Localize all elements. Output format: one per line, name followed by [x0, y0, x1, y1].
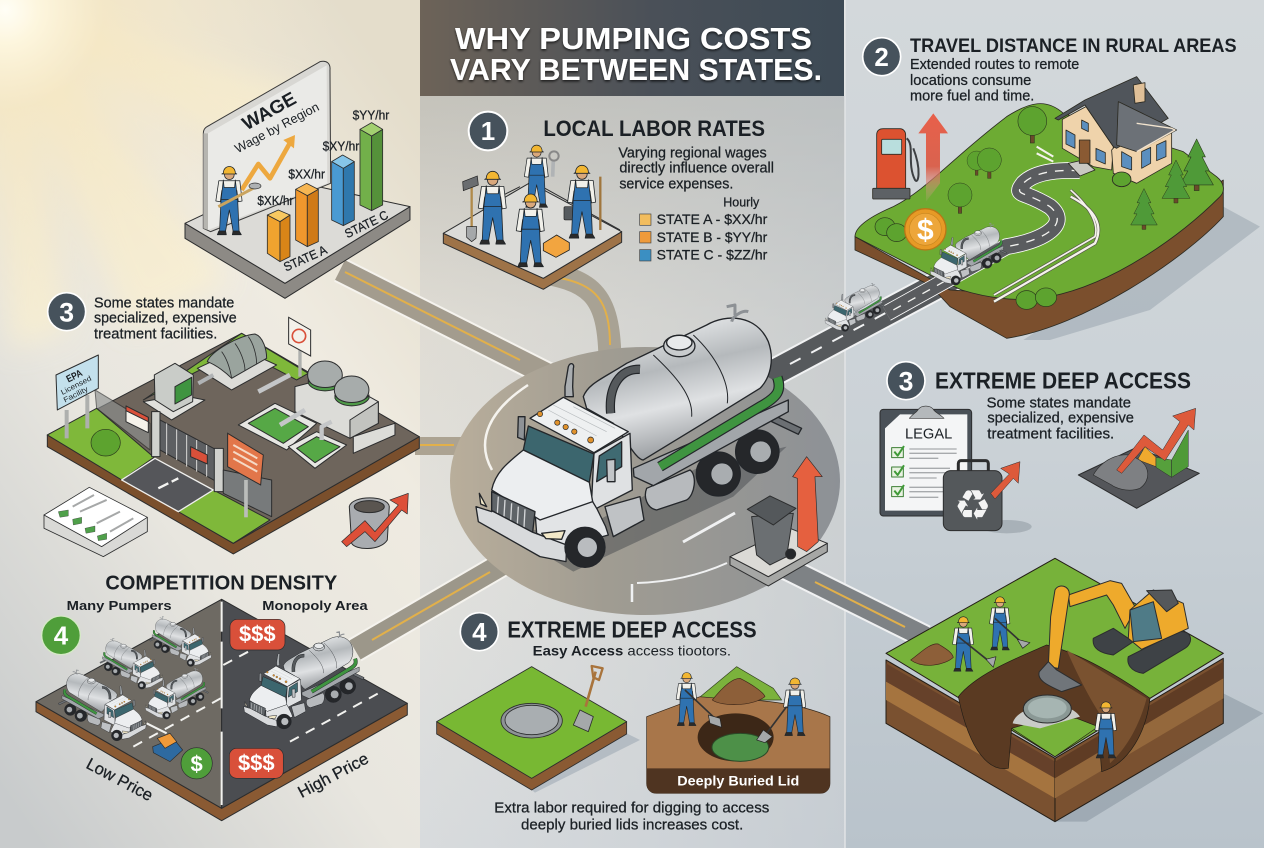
fence [994, 147, 1098, 302]
description: Extended routes to remote [910, 57, 1079, 73]
icon: checklist papers [44, 487, 147, 557]
description: more fuel and time. [910, 89, 1034, 105]
facility tile [47, 333, 419, 554]
icon: tank cost arrow [342, 493, 408, 549]
dollar coin: $ [917, 214, 934, 247]
panel: excavation site [886, 558, 1263, 822]
heading: EXTREME DEEP ACCESS [507, 616, 757, 642]
number badge 4: 4 [472, 617, 487, 647]
sign: EPA facility: Facility [62, 384, 90, 404]
sign: EPA facility: Licensed [59, 374, 93, 397]
panel: wage by region [185, 61, 410, 298]
workers with tools [463, 145, 600, 267]
wage bar labels: $XY/hr [323, 139, 360, 154]
hourly legend: Hourly [723, 196, 760, 210]
facility gate and fence [95, 390, 272, 517]
wage board: Wage by Region [232, 100, 321, 156]
sign: EPA facility [56, 355, 98, 438]
icon: recycling case with arrow: ♻ [954, 480, 991, 529]
red price tags: $$$ [239, 622, 276, 647]
excavator [1039, 581, 1191, 692]
farmhouse [1055, 77, 1177, 187]
wage board [203, 61, 331, 232]
wage bar labels [257, 107, 391, 274]
pump trucks on highway [825, 223, 1007, 331]
heading: LOCAL LABOR RATES [543, 116, 765, 141]
number badge 4: 4 [54, 621, 69, 651]
bottom description: deeply buried lids increases cost. [521, 817, 743, 833]
icon: legal clipboard [880, 406, 972, 516]
description: service expenses. [619, 176, 733, 192]
wage board: WAGE [238, 88, 300, 134]
wage bar labels: STATE C [342, 208, 391, 241]
title banner [420, 0, 844, 96]
soil pile [911, 644, 953, 665]
deeply buried lid scene [647, 667, 830, 793]
central pump truck [476, 305, 802, 572]
bottom description [494, 800, 769, 833]
dollar coin [905, 209, 946, 250]
icon: legal clipboard: LEGAL [905, 426, 952, 442]
wage platform [185, 178, 410, 298]
number badge 3 [887, 362, 925, 400]
number badge 3: 3 [899, 366, 913, 396]
wage worker [216, 166, 261, 235]
title banner: VARY BETWEEN STATES. [450, 52, 822, 87]
green dollar coin [181, 748, 212, 779]
description: treatment facilities. [94, 326, 217, 342]
icon: recycling case with arrow [943, 461, 1032, 533]
panel: competition density [36, 571, 407, 821]
green dollar coin: $ [191, 751, 203, 776]
many small pump trucks [58, 617, 211, 741]
sub-labels [67, 598, 368, 613]
title banner: WHY PUMPING COSTS [455, 21, 812, 56]
road: workers to hub [530, 270, 610, 365]
red price tags [229, 619, 285, 778]
panel: extreme deep access [437, 613, 830, 833]
road: upper left to hub [340, 270, 570, 386]
description: locations consume [910, 73, 1031, 89]
panel: treatment facilities [44, 293, 419, 557]
panel: local labor rates [443, 112, 774, 289]
sign: no entry [289, 317, 311, 377]
wage bar labels: $YY/hr [353, 107, 390, 122]
description: treatment facilities. [987, 426, 1114, 442]
easy access tile [437, 666, 640, 793]
description [94, 295, 237, 342]
heading: TRAVEL DISTANCE IN RURAL AREAS [910, 36, 1237, 57]
excavation block [886, 558, 1263, 822]
icon: mound with rising chart [1078, 408, 1199, 508]
price labels: High Price [295, 749, 372, 802]
price labels: Low Price [83, 754, 156, 805]
hourly legend [640, 196, 768, 263]
trees [875, 107, 1213, 309]
competition tile [36, 599, 407, 821]
description: Some states mandate [987, 395, 1131, 411]
description: specialized, expensive [94, 311, 237, 327]
description [987, 395, 1134, 442]
bush [91, 429, 120, 456]
description: directly influence overall [619, 161, 774, 177]
number badge 3 [48, 293, 86, 331]
price labels [83, 749, 372, 805]
workers digging [953, 597, 1116, 758]
panel: legal and regulation costs [880, 362, 1199, 533]
hourly legend: STATE C - $ZZ/hr [657, 247, 768, 263]
winding road [887, 170, 1080, 313]
dug pit [958, 645, 1150, 772]
heading: COMPETITION DENSITY [105, 571, 338, 594]
road: left facility to hub [415, 437, 475, 455]
number badge 3: 3 [59, 297, 74, 327]
wage bar labels: STATE A [282, 243, 330, 274]
wage bars [267, 123, 383, 262]
fuel cost arrow [918, 113, 948, 202]
description: specialized, expensive [987, 411, 1134, 427]
wage bar labels: $XK/hr [257, 193, 294, 208]
number badge 1 [469, 112, 507, 150]
bottom description: Extra labor required for digging to access [494, 800, 769, 816]
subheading: Easy Access access tiootors. [533, 643, 731, 659]
road: competition to hub [355, 548, 530, 650]
deeply buried lid scene: Deeply Buried Lid [677, 773, 799, 789]
description [910, 57, 1079, 105]
sign: regulation board [228, 433, 263, 517]
number badge 2: 2 [874, 42, 889, 72]
wage bar labels: $XX/hr [288, 166, 325, 181]
red price tags: $$$ [238, 751, 275, 776]
road: rural highway to hub [760, 252, 1000, 380]
workers platform [443, 183, 622, 289]
sub-labels: Many Pumpers [67, 598, 172, 613]
facility buildings and tanks [143, 334, 395, 468]
description: Varying regional wages [618, 145, 767, 161]
sign: EPA facility: EPA [65, 368, 85, 385]
road: excavation to hub [770, 560, 925, 637]
number badge 4 [42, 616, 80, 655]
central road hub [450, 347, 840, 615]
description: Some states mandate [94, 295, 234, 311]
number badge 2 [863, 38, 901, 76]
small orange cart [153, 733, 183, 762]
panel: travel distance in rural areas [825, 36, 1260, 340]
sub-labels: Monopoly Area [262, 598, 368, 613]
heading: EXTREME DEEP ACCESS [935, 367, 1191, 393]
hourly legend: STATE A - $XX/hr [657, 211, 768, 227]
fuel pump [873, 129, 919, 199]
description [618, 145, 774, 192]
trash bin with rising cost arrow [730, 457, 827, 586]
number badge 1: 1 [481, 116, 495, 146]
rural landscape [855, 104, 1260, 340]
number badge 4 [460, 613, 498, 651]
hourly legend: STATE B - $YY/hr [657, 229, 768, 245]
monopoly pump truck [244, 632, 364, 729]
